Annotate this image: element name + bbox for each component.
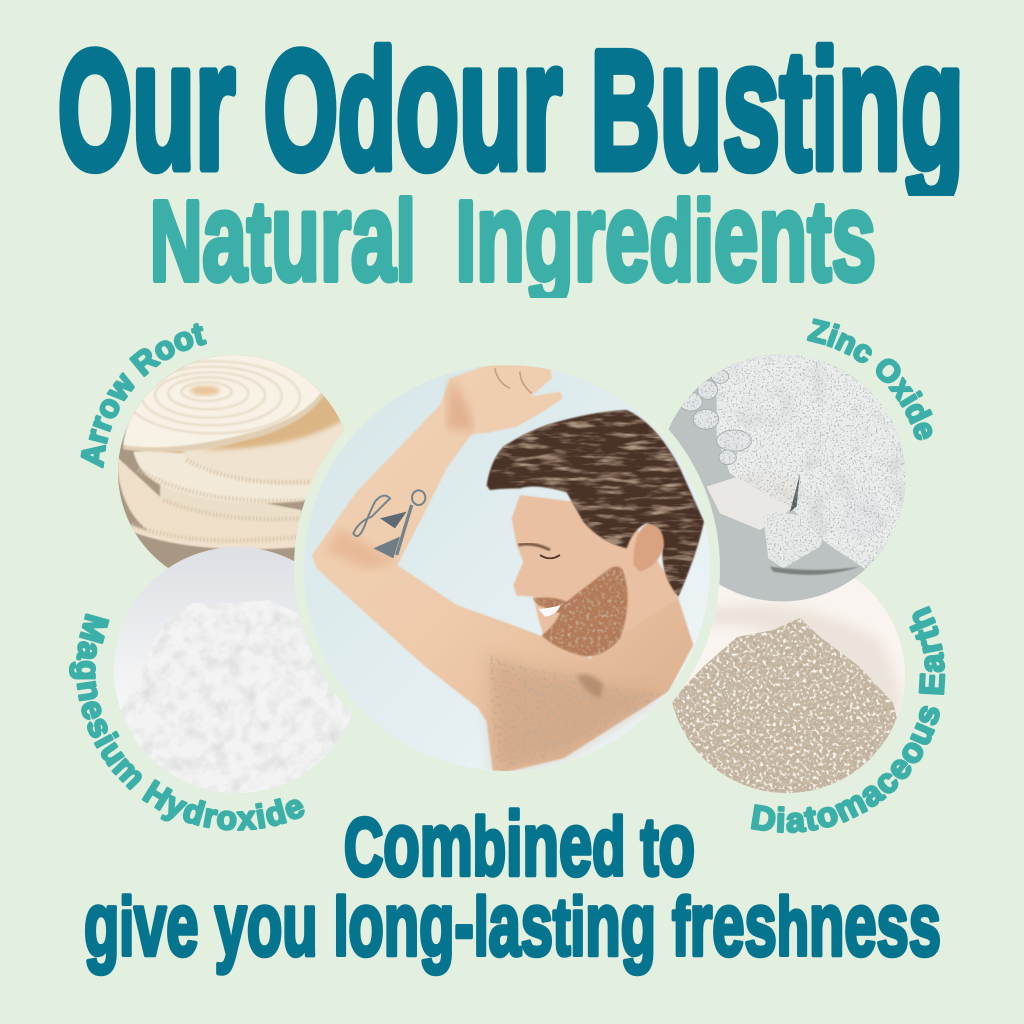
hair bbox=[487, 410, 704, 597]
photo: diatomaceous earth powder bbox=[672, 578, 905, 793]
label: zinc oxide: Zinc Oxide bbox=[806, 318, 933, 440]
eye and brow bbox=[518, 544, 550, 550]
subtitle: Natural Ingredients bbox=[150, 168, 876, 307]
beard bbox=[533, 566, 628, 657]
face bbox=[511, 494, 679, 635]
photo: zinc oxide powder bbox=[668, 354, 906, 602]
central photo: man raising arm bbox=[300, 360, 720, 780]
photo: arrow root slices bbox=[118, 355, 344, 568]
smile bbox=[538, 605, 561, 617]
arm and torso bbox=[312, 365, 693, 775]
closing line two: give you long-lasting freshness bbox=[84, 875, 941, 975]
photo ring bbox=[294, 355, 720, 781]
label: magnesium hydroxide: Magnesium Hydroxide bbox=[68, 613, 305, 831]
photo: magnesium hydroxide powder bbox=[114, 547, 352, 793]
ear bbox=[633, 524, 664, 572]
tattoo bbox=[353, 490, 425, 558]
closing line one: Combined to bbox=[344, 795, 695, 895]
label: diatomaceous earth: Diatomaceous Earth bbox=[750, 606, 946, 834]
label: arrow root: Arrow Root bbox=[80, 322, 207, 468]
